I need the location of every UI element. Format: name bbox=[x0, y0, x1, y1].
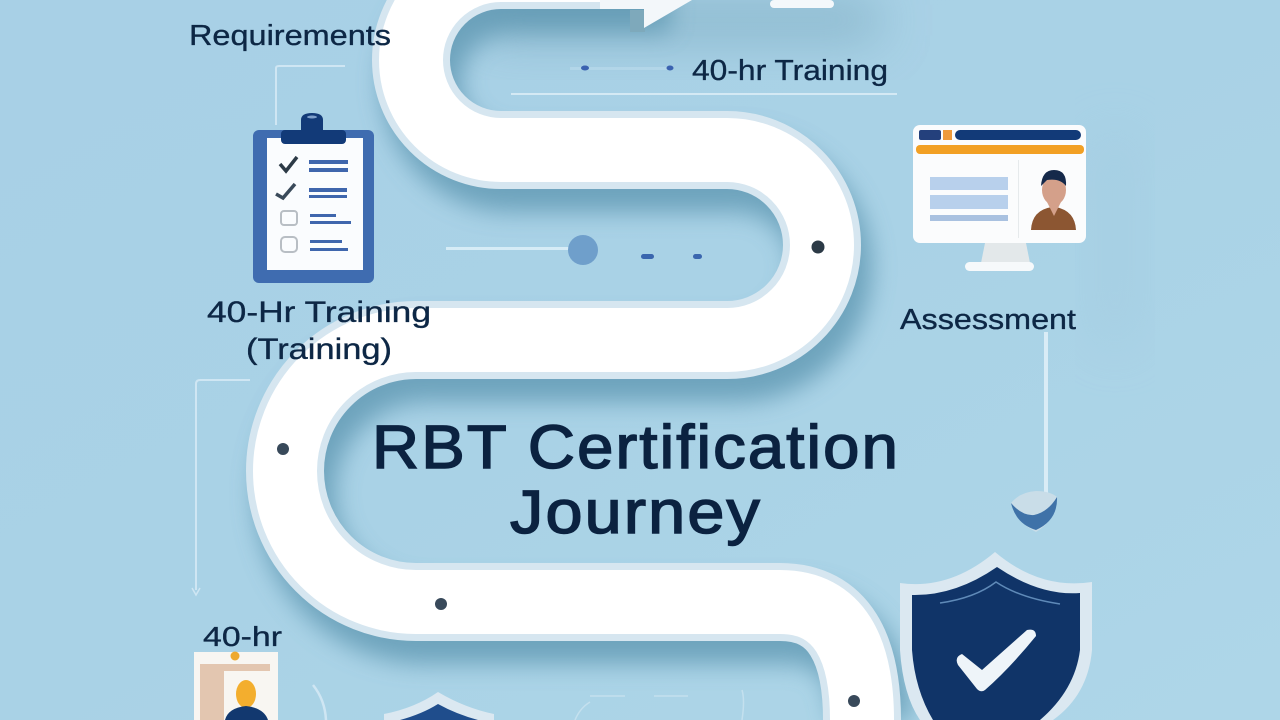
title: RBT Certification bbox=[372, 413, 900, 481]
icon: clipboard checklist bbox=[253, 113, 374, 283]
title bbox=[372, 413, 900, 546]
icon: small shield marker bbox=[1011, 491, 1057, 532]
icon: assessment monitor bbox=[913, 125, 1086, 271]
connector: assessment to shield bbox=[1044, 332, 1048, 497]
icon: bottom shield fragment bbox=[384, 692, 494, 720]
road edge bbox=[285, 0, 862, 720]
label: 40-hr Training (Training): (Training) bbox=[246, 333, 392, 366]
top timeline: 40-hr Training bbox=[511, 55, 897, 95]
road surface bbox=[285, 0, 862, 720]
connector: above clipboard bbox=[276, 66, 345, 125]
curved accent near bottom bbox=[313, 685, 326, 720]
soft background shading bbox=[480, 0, 1140, 350]
top timeline: 40-hr Training: 40-hr Training bbox=[692, 55, 888, 87]
label: Assessment: Assessment bbox=[900, 304, 1076, 336]
connector arrow tip bbox=[192, 588, 200, 595]
label: Requirements: Requirements bbox=[189, 20, 391, 52]
top monitor stand fragment bbox=[770, 0, 834, 8]
label: 40-hr: 40-hr bbox=[203, 621, 282, 652]
label: 40-hr Training (Training) bbox=[207, 296, 431, 366]
title: Journey bbox=[510, 478, 762, 546]
road drop shadow bbox=[295, 0, 872, 720]
road marker dots bbox=[277, 240, 860, 707]
icon: large navy shield with check bbox=[900, 552, 1092, 720]
connector: left vertical down to badge bbox=[196, 380, 250, 590]
faint dashes in lower loop bbox=[575, 690, 744, 720]
icon: ID badge bbox=[194, 652, 278, 720]
arrow head at road start bbox=[600, 0, 692, 32]
label: 40-hr Training (Training): 40-Hr Training bbox=[207, 296, 431, 329]
middle timeline with dot bbox=[446, 235, 702, 265]
road: serpentine path bbox=[285, 0, 872, 720]
